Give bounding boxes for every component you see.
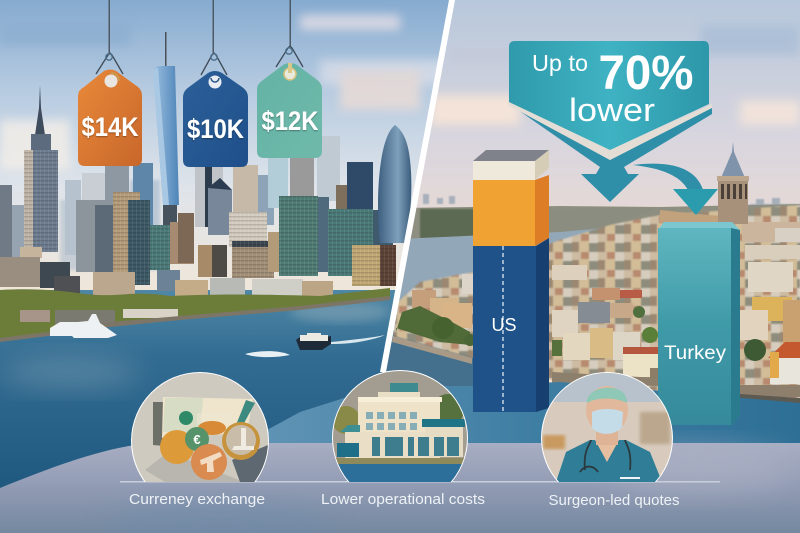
- right scene: Istanbul skyline background: [370, 0, 800, 420]
- caption: surgeon-led quotes: Surgeon-led quotes: [548, 492, 680, 509]
- hospital: [330, 383, 470, 484]
- callout banner: Up to 70% lower: Up to: [532, 50, 588, 76]
- boats: [50, 314, 385, 357]
- caption: currency exchange: Curreney exchange: [129, 491, 265, 508]
- callout banner: Up to 70% lower: 70%: [598, 47, 694, 100]
- istanbul city: [393, 205, 800, 403]
- curved arrow to Turkey bar: [633, 164, 718, 215]
- price tag: $10K: $10K: [187, 114, 244, 144]
- arrow stem and head: [508, 103, 712, 202]
- harbour strip: [392, 336, 472, 364]
- white diagonal divider: [380, 0, 455, 372]
- bottom platform: [0, 443, 800, 533]
- bar: US: US: [492, 315, 516, 335]
- coins: €: [193, 432, 201, 447]
- building: gherkin tower: [378, 125, 411, 243]
- feature circle: hospital building: [332, 370, 468, 482]
- building: one world trade: [153, 32, 179, 225]
- left scene: New York skyline: [0, 0, 453, 510]
- bar: US: [473, 150, 549, 412]
- banknotes: [145, 397, 268, 482]
- callout banner: Up to 70% lower: lower: [569, 92, 655, 128]
- stage under bars: [267, 382, 800, 445]
- price tag: $10K: [183, 0, 248, 167]
- callout banner: Up to 70% lower: [508, 41, 712, 202]
- price tag: $12K: $12K: [262, 106, 319, 136]
- waterfront trees and promenade: [0, 288, 390, 342]
- price tag: $14K: [78, 0, 142, 166]
- building: midtown blocks: [0, 178, 396, 297]
- price tag: $14K: $14K: [82, 112, 139, 142]
- building: empire state: [20, 85, 58, 258]
- feature circle: currency exchange: [131, 372, 269, 482]
- surgeon: [556, 386, 662, 482]
- feature circle: surgeon portrait: [541, 372, 673, 482]
- building: far towers: [0, 136, 373, 265]
- bar: Turkey: Turkey: [664, 343, 727, 364]
- galata tower: [717, 142, 749, 224]
- caption: lower operational costs: Lower operational costs: [321, 491, 485, 508]
- bar: Turkey: [658, 222, 740, 426]
- price tag: $12K: [257, 0, 322, 158]
